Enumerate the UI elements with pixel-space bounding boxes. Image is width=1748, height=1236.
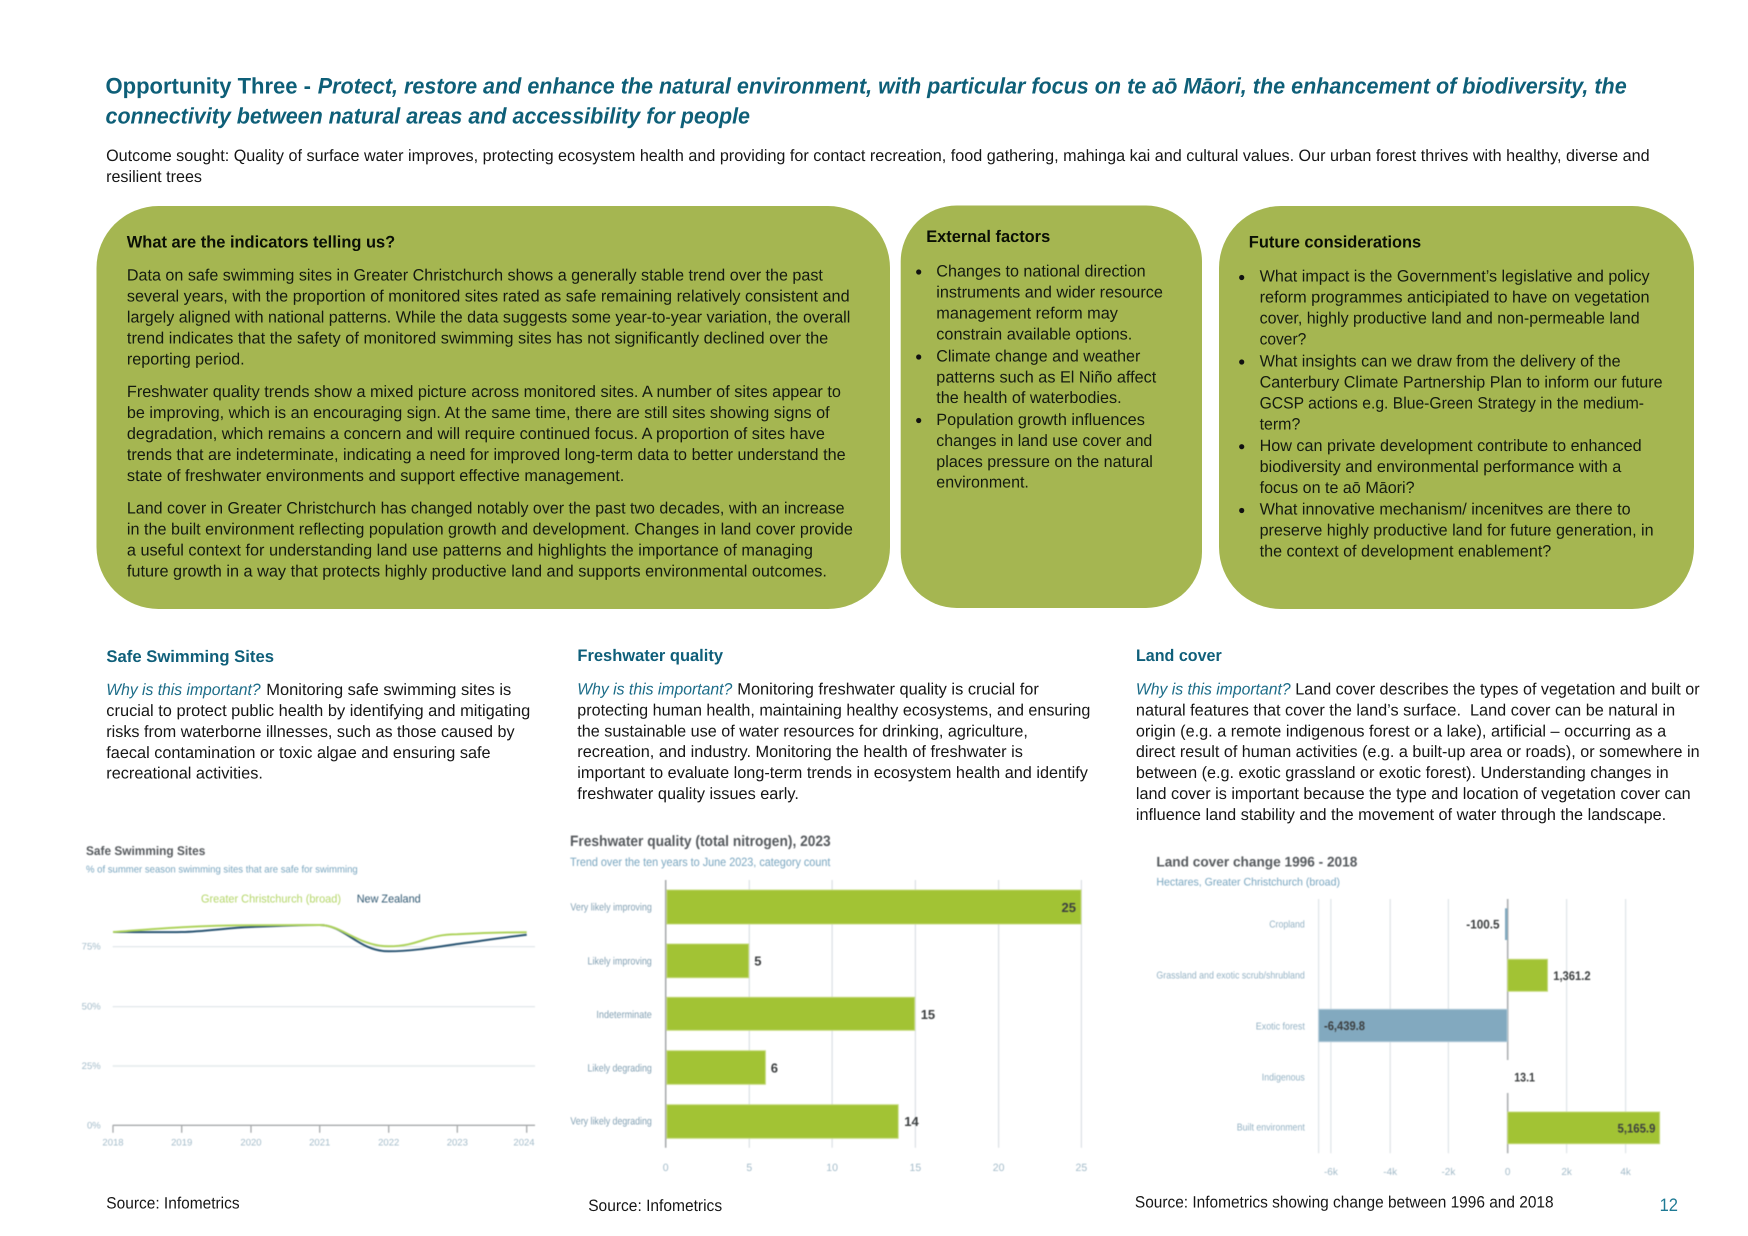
text block: land cover importance: between (e.g. exotic grassland or exotic forest). Understanding changes in bbox=[1136, 764, 1669, 782]
paragraph: safe swimming summary: Data on safe swimming sites in Greater Christchurch shows a generally stable trend over the past bbox=[127, 267, 823, 285]
paragraph: freshwater summary bbox=[127, 383, 846, 485]
paragraph: freshwater summary: degradation, which remains a concern and will require continued focus. A proportion of sites have bbox=[127, 425, 825, 443]
x axis labels: 4k bbox=[1620, 1167, 1632, 1178]
y axis labels: 25% bbox=[82, 1061, 101, 1072]
paragraph: freshwater summary: state of freshwater environments and support effective management. bbox=[127, 467, 624, 485]
bars bbox=[1319, 908, 1660, 1144]
category labels: Indeterminate bbox=[596, 1009, 652, 1021]
bullet list: future considerations: reform programmes anticipiated to have on vegetation bbox=[1260, 289, 1650, 307]
paragraph: safe swimming summary: largely aligned with national patterns. While the data suggests some year-to-year variation, the overall bbox=[127, 309, 850, 327]
title: connectivity between natural areas and accessibility for people bbox=[106, 104, 750, 129]
bullet list: future considerations: preserve highly productive land for future generation, in bbox=[1260, 522, 1654, 540]
category labels bbox=[570, 901, 652, 1128]
x axis labels: 5 bbox=[746, 1162, 752, 1174]
legend bbox=[201, 894, 421, 906]
paragraph: land cover summary: future growth in a way that protects highly productive land and supports environmental outcomes. bbox=[127, 563, 827, 581]
bullet list: future considerations: cover? bbox=[1260, 331, 1306, 349]
bullet list: external factors: constrain available options. bbox=[936, 325, 1132, 343]
text block: freshwater importance: protecting human health, maintaining healthy ecosystems, and ensuring bbox=[577, 701, 1090, 719]
bullet list: external factors: Population growth influences bbox=[936, 411, 1145, 429]
bullet list: external factors: management reform may bbox=[936, 305, 1119, 323]
chart subtitle: freshwater: Trend over the ten years to June 2023, category count bbox=[570, 855, 831, 869]
category labels: Very likely degrading bbox=[570, 1116, 652, 1128]
bullet list: external factors: Climate change and weather bbox=[936, 347, 1141, 365]
line chart: safe swimming sites bbox=[82, 844, 535, 1149]
gridlines bbox=[749, 880, 1081, 1148]
x axis labels: 2k bbox=[1561, 1167, 1573, 1178]
paragraph: freshwater summary: Freshwater quality trends show a mixed picture across monitored sites. A number of sites appear to bbox=[127, 383, 841, 401]
bullet list: external factors: the health of waterbodies. bbox=[936, 389, 1122, 407]
x axis labels: 2022 bbox=[378, 1138, 399, 1149]
text block: freshwater importance: Monitoring freshwater quality is crucial for bbox=[737, 680, 1039, 698]
panel: future considerations bbox=[1219, 206, 1694, 609]
bullet list: future considerations: cover, highly productive land and non-permeable land bbox=[1260, 310, 1640, 328]
x axis labels bbox=[102, 1138, 535, 1149]
y axis labels: 0% bbox=[87, 1120, 101, 1132]
bar values: 5 bbox=[754, 954, 762, 969]
text block: land cover importance: land cover is important because the type and location of vegetation cover can bbox=[1136, 785, 1691, 803]
chart subtitle: land cover: Hectares, Greater Christchurch (broad) bbox=[1156, 876, 1340, 888]
x axis labels: 2021 bbox=[309, 1138, 330, 1149]
bars bbox=[667, 890, 1081, 1138]
chart title: safe swimming: Safe Swimming Sites bbox=[86, 844, 205, 858]
bar values: 5,165.9 bbox=[1618, 1122, 1655, 1136]
bar chart: freshwater quality bbox=[570, 833, 1087, 1174]
panel heading: external factors: External factors bbox=[926, 227, 1050, 246]
bar values: -6,439.8 bbox=[1324, 1019, 1365, 1033]
text block: freshwater importance: the sustainable use of water resources for drinking, agriculture, bbox=[577, 722, 1028, 740]
panel heading: indicators: What are the indicators telling us? bbox=[127, 233, 395, 252]
title bbox=[106, 74, 1627, 128]
source: land cover: Source: Infometrics showing change between 1996 and 2018 bbox=[1135, 1194, 1554, 1212]
bullet list: external factors: places pressure on the natural bbox=[936, 453, 1153, 471]
title: Opportunity Three - bbox=[106, 74, 311, 99]
outcome sought text bbox=[106, 147, 1650, 186]
chart subtitle: safe swimming: % of summer season swimming sites that are safe for swimming bbox=[86, 865, 358, 876]
y axis labels: 50% bbox=[82, 1002, 101, 1012]
source: safe swimming: Source: Infometrics bbox=[106, 1194, 240, 1212]
panel: external factors bbox=[901, 206, 1202, 608]
category labels: Likely improving bbox=[588, 955, 652, 967]
x axis labels bbox=[663, 1162, 1087, 1174]
category labels: Indigenous bbox=[1262, 1073, 1305, 1084]
category labels: Built environment bbox=[1237, 1123, 1305, 1134]
paragraph: land cover summary: a useful context for understanding land use patterns and highlights the importance of managing bbox=[127, 542, 813, 560]
grid and axis bbox=[113, 947, 535, 1133]
title: Protect, restore and enhance the natural environment, with particular focus on te aō Māori, the enhancement of biodiversity, the bbox=[318, 74, 1627, 99]
y axis labels: 75% bbox=[82, 942, 101, 952]
text block: land cover importance: origin (e.g. a remote indigenous forest or a lake), artificial – occurring as a bbox=[1136, 722, 1667, 740]
chart title: land cover: Land cover change 1996 - 2018 bbox=[1156, 854, 1358, 870]
text block: freshwater importance: freshwater quality issues early. bbox=[577, 785, 799, 803]
text block: safe swimming importance bbox=[106, 681, 530, 783]
text block: safe swimming importance: risks from waterborne illnesses, such as those caused by bbox=[106, 723, 515, 741]
x axis labels: 25 bbox=[1076, 1162, 1087, 1174]
x axis labels: -2k bbox=[1441, 1167, 1456, 1178]
category labels: Cropland bbox=[1269, 919, 1305, 930]
text block: land cover importance: natural features that cover the land’s surface. Land cover can be natural in bbox=[1136, 701, 1675, 719]
paragraph: land cover summary: in the built environment reflecting population growth and development. Changes in land cover provide bbox=[127, 521, 853, 539]
paragraph: safe swimming summary: trend indicates that the safety of monitored swimming sites has not significantly declined over the bbox=[127, 330, 828, 348]
paragraph: safe swimming summary: reporting period. bbox=[127, 351, 245, 369]
bullet list: future considerations: Canterbury Climate Partnership Plan to inform our future bbox=[1260, 373, 1663, 391]
text block: land cover importance bbox=[1136, 680, 1700, 824]
bullet list: future considerations bbox=[1239, 268, 1663, 560]
line: Greater Christchurch bbox=[113, 925, 527, 946]
bullet list: external factors: changes in land use cover and bbox=[936, 432, 1152, 450]
text block: land cover importance: direct result of human activities (e.g. a built-up area or roads), or somewhere in bbox=[1136, 743, 1700, 761]
x axis labels: 2018 bbox=[102, 1138, 124, 1149]
bar values: -100.5 bbox=[1466, 918, 1500, 932]
x axis labels: -4k bbox=[1383, 1167, 1398, 1178]
bullet list: future considerations: GCSP actions e.g. Blue-Green Strategy in the medium- bbox=[1260, 394, 1644, 412]
category labels: Grassland and exotic scrub/shrubland bbox=[1156, 970, 1305, 981]
panel: what are the indicators telling us bbox=[96, 206, 890, 609]
x axis labels: 0 bbox=[1505, 1167, 1511, 1178]
bar values: 1,361.2 bbox=[1553, 969, 1591, 983]
text block: safe swimming importance: Monitoring safe swimming sites is bbox=[266, 681, 511, 699]
bullet list: external factors bbox=[916, 263, 1163, 492]
bar values: 14 bbox=[904, 1114, 920, 1129]
category labels: Exotic forest bbox=[1256, 1021, 1305, 1032]
x axis labels: 20 bbox=[993, 1162, 1005, 1174]
legend: New Zealand bbox=[357, 894, 421, 906]
text block: freshwater importance bbox=[577, 680, 1090, 803]
x axis labels: 15 bbox=[910, 1162, 921, 1174]
bullet list: external factors: instruments and wider resource bbox=[936, 284, 1163, 302]
x axis labels: 2023 bbox=[447, 1138, 468, 1149]
gridlines bbox=[1319, 899, 1626, 1153]
bullet list: future considerations: the context of development enablement? bbox=[1260, 542, 1551, 560]
text block: safe swimming importance: Why is this important? bbox=[106, 681, 261, 699]
bullet list: future considerations: What innovative mechanism/ incenitves are there to bbox=[1260, 501, 1631, 519]
text block: land cover importance: Why is this important? bbox=[1136, 680, 1291, 698]
bullet list: external factors: patterns such as El Niño affect bbox=[936, 368, 1157, 386]
line: New Zealand bbox=[113, 925, 527, 951]
paragraph: safe swimming summary: several years, with the proportion of monitored sites rated as safe remaining relatively consistent and bbox=[127, 288, 850, 306]
panel heading: future considerations: Future considerations bbox=[1249, 233, 1421, 252]
bar values: 15 bbox=[921, 1007, 935, 1022]
x axis labels: 2024 bbox=[513, 1138, 535, 1149]
text block: safe swimming importance: crucial to protect public health by identifying and mitigating bbox=[106, 702, 530, 720]
x axis labels: 0 bbox=[663, 1162, 669, 1174]
bar values bbox=[1324, 918, 1655, 1136]
x axis labels: 10 bbox=[826, 1162, 838, 1174]
text block: safe swimming importance: faecal contamination or toxic algae and ensuring safe bbox=[106, 744, 491, 762]
text block: freshwater importance: Why is this important? bbox=[577, 680, 733, 698]
chart title: freshwater: Freshwater quality (total nitrogen), 2023 bbox=[570, 833, 831, 850]
bullet list: future considerations: term? bbox=[1260, 415, 1300, 433]
bullet list: future considerations: focus on te aō Māori? bbox=[1260, 479, 1415, 497]
category labels bbox=[1156, 919, 1305, 1134]
outcome sought text: Outcome sought: Quality of surface water improves, protecting ecosystem health and providing for contact recreation, food gathering, mahinga kai and cultural values. Our urban forest thrives with healthy, diverse and bbox=[106, 147, 1650, 165]
x axis labels bbox=[1324, 1167, 1632, 1178]
legend: Greater Christchurch (broad) bbox=[201, 894, 341, 906]
bullet list: external factors: Changes to national direction bbox=[936, 263, 1146, 281]
text block: land cover importance: influence land stability and the movement of water through the landscape. bbox=[1136, 806, 1666, 824]
bar values: 6 bbox=[771, 1061, 778, 1076]
paragraph: freshwater summary: trends that are indeterminate, indicating a need for improved long-term data to better understand the bbox=[127, 446, 846, 464]
bar values: 13.1 bbox=[1514, 1071, 1535, 1085]
page number: 12 bbox=[1660, 1195, 1678, 1215]
text block: safe swimming importance: recreational activities. bbox=[106, 765, 263, 783]
y axis labels bbox=[82, 942, 101, 1132]
category labels: Likely degrading bbox=[588, 1063, 652, 1075]
bullet list: future considerations: What impact is the Government’s legislative and policy bbox=[1260, 268, 1650, 286]
outcome sought text: resilient trees bbox=[106, 168, 202, 186]
category labels: Very likely improving bbox=[570, 901, 652, 913]
paragraph: safe swimming summary bbox=[127, 267, 850, 369]
x axis labels: -6k bbox=[1324, 1167, 1339, 1178]
x axis labels: 2020 bbox=[240, 1138, 262, 1149]
text block: land cover importance: Land cover describes the types of vegetation and built or bbox=[1295, 680, 1700, 698]
bullet list: future considerations: How can private development contribute to enhanced bbox=[1260, 437, 1642, 455]
bar values bbox=[754, 900, 1076, 1129]
section heading: safe swimming sites: Safe Swimming Sites bbox=[106, 647, 274, 666]
paragraph: freshwater summary: be improving, which is an encouraging sign. At the same time, there are still sites showing signs of bbox=[127, 404, 830, 422]
bullet list: future considerations: What insights can we draw from the delivery of the bbox=[1260, 352, 1621, 370]
section heading: freshwater quality: Freshwater quality bbox=[577, 646, 724, 665]
text block: freshwater importance: recreation, and industry. Monitoring the health of freshwater is bbox=[577, 743, 1023, 761]
source: freshwater: Source: Infometrics bbox=[588, 1197, 722, 1215]
text block: freshwater importance: important to evaluate long-term trends in ecosystem health and identify bbox=[577, 764, 1089, 782]
bullet list: future considerations: biodiversity and environmental performance with a bbox=[1260, 458, 1622, 476]
paragraph: land cover summary bbox=[127, 500, 853, 581]
x axis labels: 2019 bbox=[171, 1138, 192, 1149]
bar values: 25 bbox=[1062, 900, 1076, 915]
bar chart: land cover change bbox=[1156, 854, 1660, 1178]
bullet list: external factors: environment. bbox=[936, 474, 1029, 492]
section heading: land cover: Land cover bbox=[1136, 646, 1222, 665]
paragraph: land cover summary: Land cover in Greater Christchurch has changed notably over the past two decades, with an increase bbox=[127, 500, 845, 518]
